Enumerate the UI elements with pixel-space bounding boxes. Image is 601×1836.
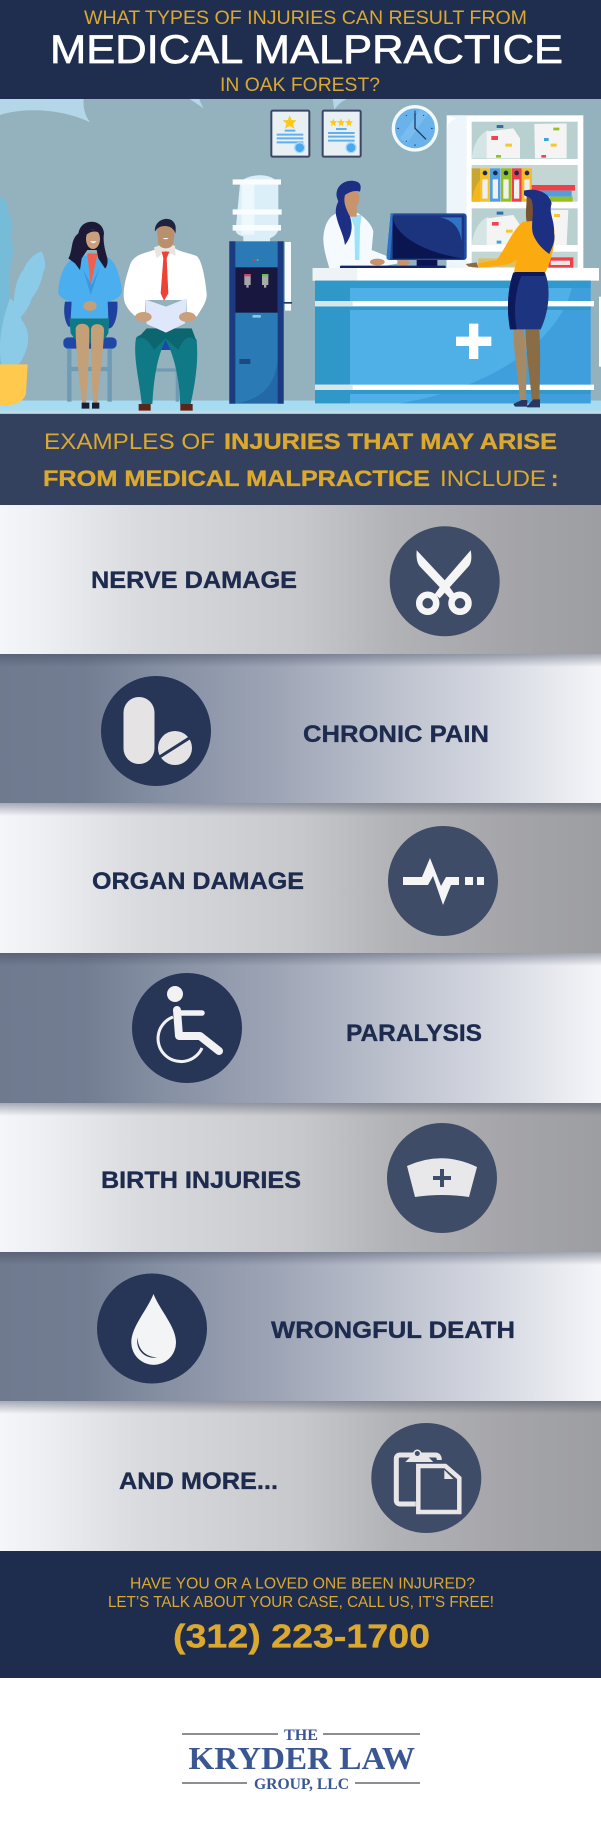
band: birth injuries — [0, 1103, 601, 1252]
icon: heartbeat pulse — [388, 826, 498, 936]
cta line two: LET’S TALK ABOUT YOUR CASE, CALL US, IT’S FREE! — [108, 1594, 494, 1611]
binders — [472, 168, 575, 268]
chair under woman — [63, 302, 118, 402]
band: chronic pain — [0, 654, 601, 803]
decorative ceiling leaves — [0, 99, 347, 122]
banner line two — [43, 466, 558, 491]
icon: pills — [101, 676, 211, 786]
label: organ damage: ORGAN DAMAGE — [92, 868, 304, 895]
patient upper body — [466, 190, 555, 276]
banner line two: FROM MEDICAL MALPRACTICE — [43, 466, 430, 491]
header line: what types of injuries: WHAT TYPES OF INJURIES CAN RESULT FROM — [84, 7, 527, 29]
header panel — [0, 0, 601, 99]
reception desk and patient lower — [313, 268, 601, 407]
band: paralysis — [0, 953, 601, 1103]
certificate 1 — [271, 111, 309, 157]
icon: medical cross — [456, 324, 491, 359]
band: organ damage — [0, 803, 601, 953]
doctor at desk — [323, 181, 409, 268]
floor — [0, 400, 601, 414]
banner line two: : — [551, 466, 558, 491]
banner line one: INJURIES THAT MAY ARISE — [224, 429, 557, 454]
logo word: the: THE — [284, 1727, 318, 1744]
band: and more — [0, 1401, 601, 1551]
computer monitor — [340, 213, 467, 269]
header line: in oak forest: IN OAK FOREST? — [220, 74, 380, 96]
icon: potted plant — [0, 198, 45, 406]
band: nerve damage — [0, 505, 601, 654]
chair under man — [151, 340, 180, 402]
icon: scissors — [390, 526, 500, 636]
logo: the kryder law group — [182, 1727, 420, 1793]
title: medical malpractice: MEDICAL MALPRACTICE — [50, 28, 563, 72]
band: wrongful death — [0, 1252, 601, 1401]
back wall: certificates, clock, shelves, doctor, monitor — [271, 105, 583, 269]
banner line one: EXAMPLES OF — [44, 429, 215, 454]
icon: drop — [97, 1274, 207, 1384]
label: chronic pain: CHRONIC PAIN — [303, 721, 489, 748]
label: wrongful death: WRONGFUL DEATH — [271, 1317, 515, 1344]
man seated reading — [124, 219, 207, 411]
shelving cabinet — [447, 115, 583, 269]
footer call to action panel — [0, 1551, 601, 1678]
banner line one — [44, 429, 557, 454]
patient skirt and legs — [508, 273, 549, 407]
woman seated — [58, 222, 122, 409]
label: and more: AND MORE... — [119, 1468, 278, 1495]
water cooler — [229, 175, 292, 404]
icon: clipboard and document — [371, 1423, 481, 1533]
reception desk — [313, 268, 601, 403]
cta line one: HAVE YOU OR A LOVED ONE BEEN INJURED? — [130, 1576, 475, 1592]
banner line two: INCLUDE — [440, 466, 546, 491]
label: nerve damage: NERVE DAMAGE — [91, 567, 297, 594]
certificate 2 — [323, 111, 361, 157]
icon: nurse cap — [387, 1123, 497, 1233]
icon: wall clock — [392, 105, 438, 152]
icon: wheelchair — [132, 973, 242, 1083]
phone number: (312) 223-1700 — [173, 1618, 430, 1654]
waiting area: plant, people and cooler — [0, 175, 292, 411]
logo word: group llc: GROUP, LLC — [254, 1776, 349, 1793]
illustration: medical office reception — [0, 99, 601, 414]
paper stacks — [472, 123, 568, 245]
banner panel — [0, 414, 601, 505]
logo word: kryder law: KRYDER LAW — [188, 1740, 415, 1776]
label: paralysis: PARALYSIS — [346, 1020, 482, 1047]
label: birth injuries: BIRTH INJURIES — [101, 1167, 301, 1194]
